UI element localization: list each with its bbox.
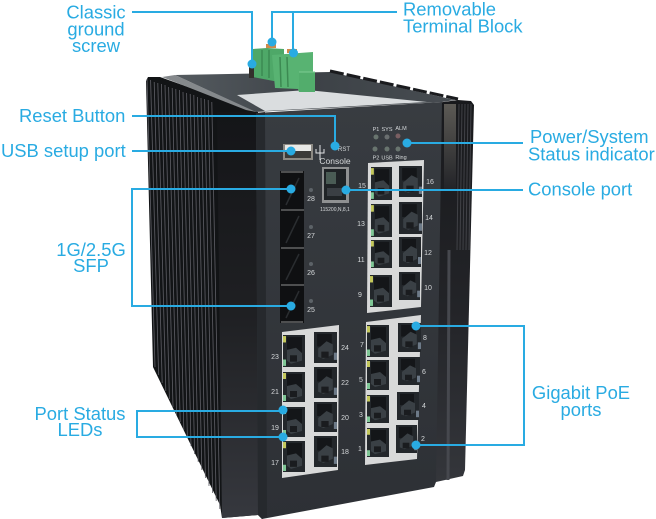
callout: USB setup port [1, 140, 296, 161]
SFP LEDs and numbers: 25 [307, 307, 315, 314]
port numbers 1-8: 6 [422, 369, 426, 376]
port numbers 1-8: 3 [359, 412, 363, 419]
port numbers 9-16: 13 [357, 221, 365, 228]
port numbers 1-8: 5 [359, 377, 363, 384]
port numbers 1-8: 7 [360, 342, 364, 349]
port numbers 17-24: 19 [271, 425, 279, 432]
reset label: RST [338, 147, 350, 153]
ground screw [249, 66, 254, 78]
callout: port status LEDs: LEDs [58, 419, 102, 440]
port numbers 17-24: 23 [271, 354, 279, 361]
SFP LEDs and numbers: 28 [307, 196, 315, 203]
right side with fins [436, 100, 474, 482]
callout: port status LEDs: Port Status [35, 403, 125, 424]
top edge highlight [162, 75, 256, 112]
USB port [283, 144, 313, 160]
console text: Console [319, 156, 351, 166]
callout: SFP [56, 184, 296, 310]
port numbers 9-16: 14 [425, 215, 433, 222]
port numbers 1-8 [358, 335, 427, 453]
callout: gigabit PoE ports: Gigabit PoE [532, 382, 630, 403]
SFP LEDs and numbers: 27 [307, 233, 315, 240]
callout: console port: Console port [528, 178, 632, 200]
port numbers 17-24 [271, 345, 349, 467]
port numbers 1-8: 2 [421, 436, 425, 443]
callout: power/system status indicator: Power/System [530, 126, 649, 147]
callout: SFP: 1G/2.5G [56, 239, 126, 260]
callout: gigabit PoE ports: ports [561, 399, 601, 420]
port numbers 9-16: 9 [358, 292, 362, 299]
port numbers 1-8: 8 [423, 335, 427, 342]
port numbers 17-24: 18 [341, 449, 349, 456]
status LEDs: P1 [373, 127, 379, 133]
callout: port status LEDs [35, 403, 288, 442]
status LEDs: SYS [381, 127, 393, 133]
switch device [146, 44, 474, 519]
callout: SFP: SFP [73, 255, 109, 276]
callout: console port [342, 178, 632, 200]
callout: removable terminal block [268, 0, 523, 58]
callout: classic ground screw: screw [72, 35, 121, 56]
callout: power/system status indicator: Status indicator [528, 144, 655, 164]
front panel [256, 102, 442, 519]
callout: gigabit PoE ports [412, 322, 630, 450]
port numbers 9-16: 12 [424, 250, 432, 257]
port numbers 9-16: 11 [357, 257, 365, 264]
terminal blocks [253, 44, 315, 92]
port numbers 17-24: 17 [271, 460, 279, 467]
port numbers 17-24: 21 [271, 389, 279, 396]
status LEDs: Ring [395, 155, 407, 161]
USB symbol [316, 145, 324, 160]
port block 1-8 [365, 315, 421, 465]
callout: reset button [19, 105, 340, 150]
SFP LEDs and numbers: 26 [307, 270, 315, 277]
port numbers 17-24: 22 [341, 380, 349, 387]
status LEDs: P2 [373, 156, 379, 162]
status LEDs: ALM [395, 126, 407, 132]
status LEDs [372, 126, 407, 162]
port numbers 17-24: 24 [341, 345, 349, 352]
status LEDs: USB [381, 156, 393, 162]
port numbers 1-8: 4 [422, 403, 426, 410]
console port [322, 167, 349, 203]
callout: removable terminal block: Terminal Block [403, 16, 523, 36]
left heatsink fins [146, 77, 258, 518]
port numbers 17-24: 20 [341, 415, 349, 422]
SFP LEDs and numbers [307, 188, 315, 314]
console settings text: 115200,N,8,1 [320, 207, 350, 213]
port block 17-24 [282, 325, 339, 478]
callout: reset button: Reset Button [19, 105, 125, 126]
port numbers 9-16 [357, 179, 434, 299]
SFP cage [280, 171, 304, 323]
callout: USB setup port: USB setup port [1, 140, 126, 161]
panel left edge [256, 112, 267, 519]
port numbers 9-16: 10 [424, 285, 432, 292]
port block 9-16 [367, 160, 424, 313]
callout: classic ground screw: ground [67, 18, 125, 40]
callout: classic ground screw: Classic [66, 2, 126, 22]
callout: classic ground screw [66, 2, 256, 68]
port numbers 9-16: 15 [358, 183, 366, 190]
top surface [175, 72, 455, 112]
port numbers 1-8: 1 [358, 446, 362, 453]
callout: power/system status indicator [402, 126, 655, 164]
port numbers 9-16: 16 [426, 179, 434, 186]
product label [237, 90, 427, 111]
rear fin strip [330, 71, 458, 99]
